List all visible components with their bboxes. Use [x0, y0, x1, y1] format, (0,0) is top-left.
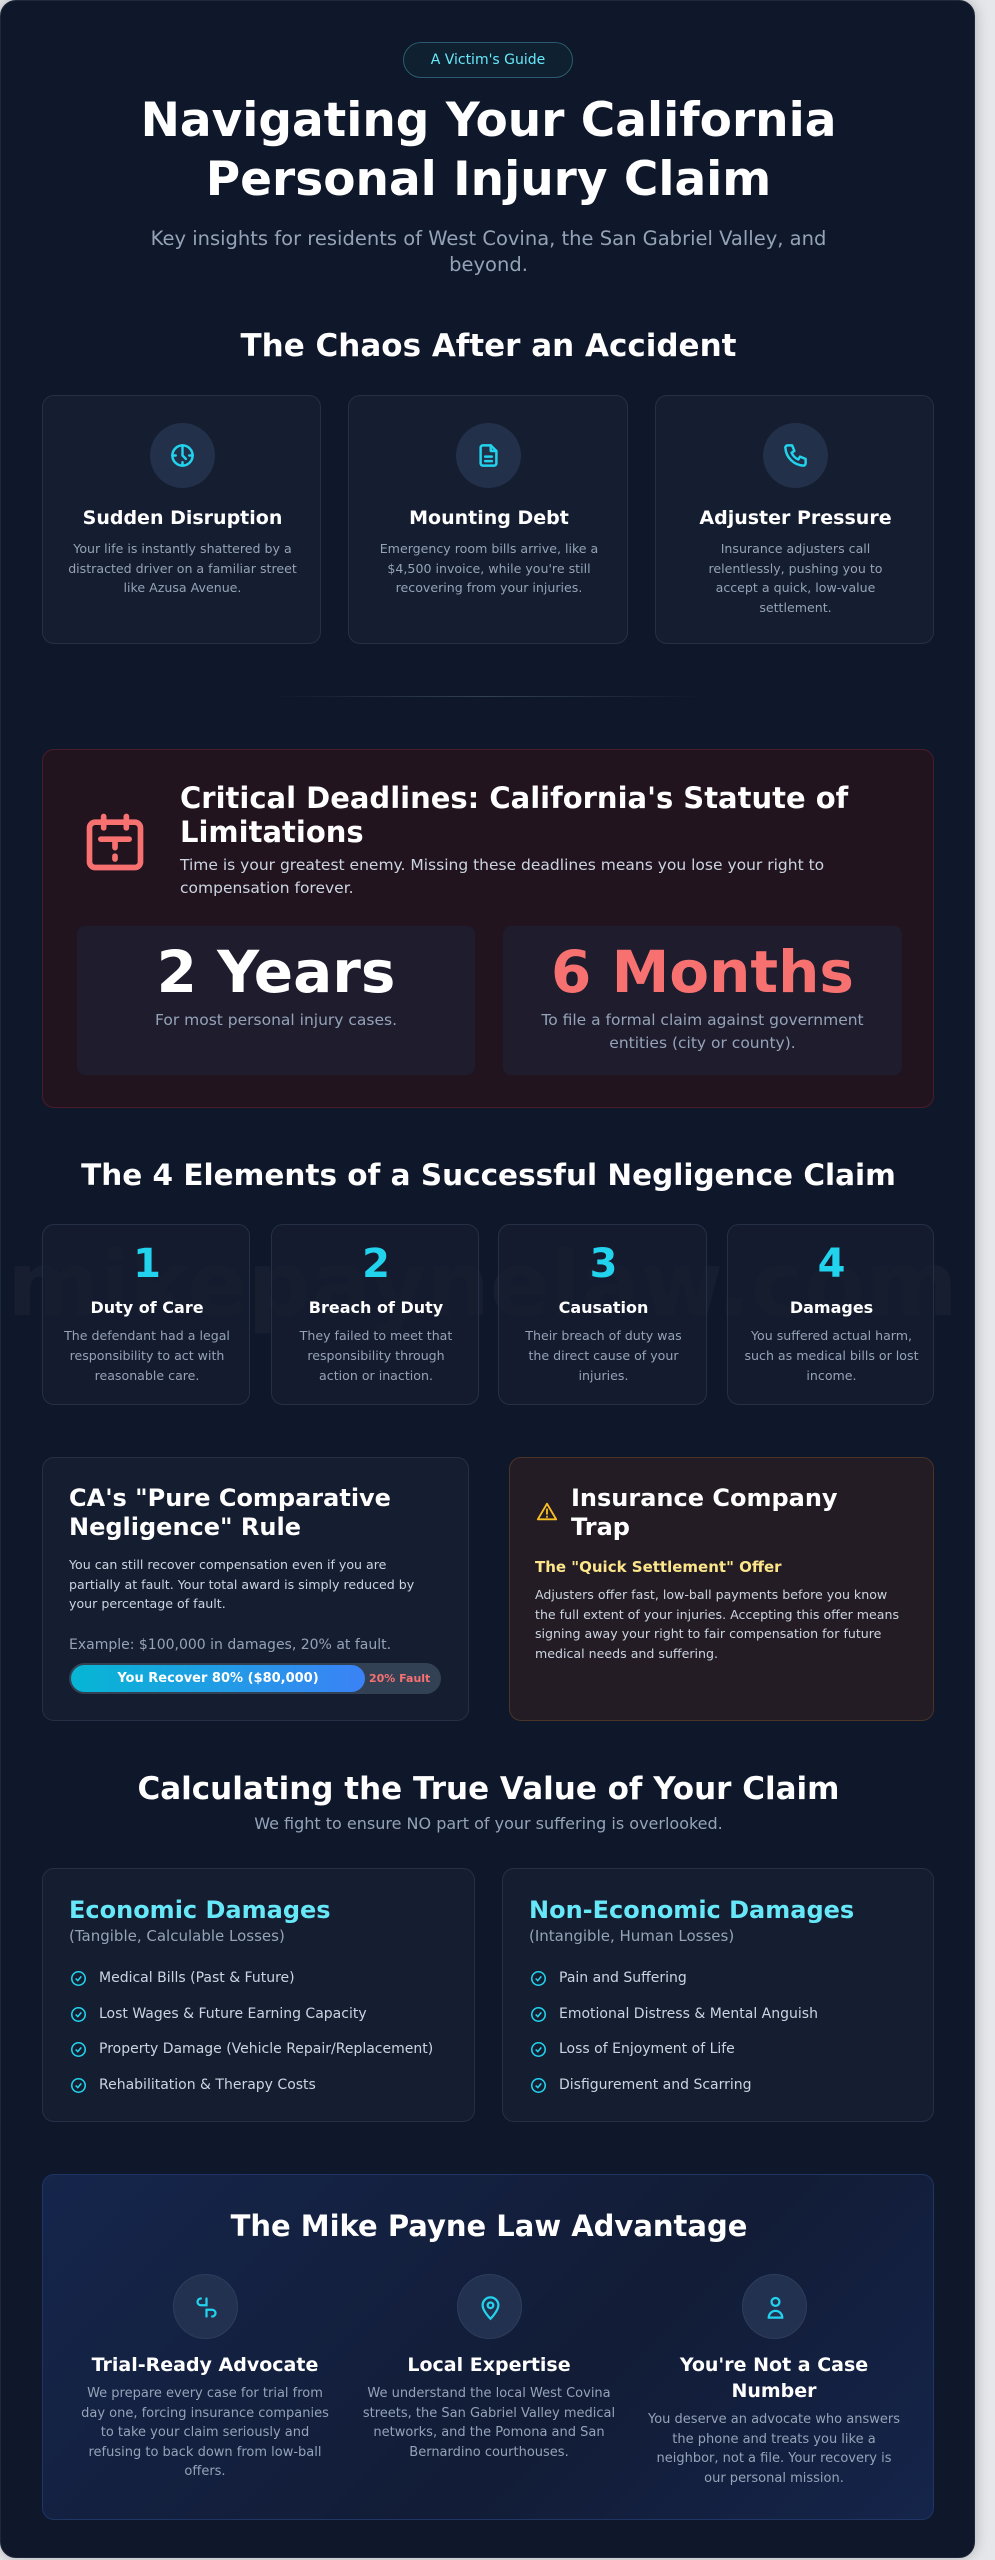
- stat: 6 months: To file a formal claim against government entities (city or county).: [541, 1011, 864, 1052]
- list: non-economic: [531, 1970, 818, 2093]
- list: non-economic: Disfigurement and Scarring: [559, 2076, 752, 2092]
- list: economic: Lost Wages & Future Earning Capacity: [99, 2006, 367, 2022]
- element 1: [42, 1224, 250, 1405]
- panel: non-economic damages: (Intangible, Human Losses): [529, 1927, 734, 1945]
- card: Sudden Disruption: Sudden Disruption: [83, 507, 282, 529]
- advantage: trial-ready: Trial-Ready Advocate: [92, 2354, 318, 2376]
- panel: non-economic damages: [502, 1868, 934, 2122]
- element 3: 3: [590, 1241, 617, 1287]
- card: Mounting Debt: Mounting Debt: [409, 507, 569, 529]
- advantage: trial-ready: We prepare every case for trial from day one, forcing insurance companies to take your claim seriously and refusing to back down from low-ball offers.: [81, 2386, 329, 2479]
- text: deadline intro: Time is your greatest enemy. Missing these deadlines means you lose your right to compensation forever.: [180, 856, 824, 897]
- card: Adjuster Pressure: Adjuster Pressure: [699, 507, 892, 529]
- icon: clock: [150, 423, 215, 488]
- bar: recovery: 20% Fault: [369, 1672, 430, 1685]
- list: economic: Rehabilitation & Therapy Costs: [99, 2076, 316, 2092]
- title: Personal Injury Claim: [206, 152, 771, 207]
- card: Sudden Disruption: [42, 395, 321, 644]
- element 2: They failed to meet that responsibility through action or inaction.: [300, 1328, 452, 1383]
- element 1: The defendant had a legal responsibility to act with reasonable care.: [64, 1328, 230, 1383]
- element 1: 1: [133, 1241, 161, 1287]
- panel: non-economic damages: Non-Economic Damages: [529, 1896, 854, 1924]
- subtitle: Key insights for residents of West Covina, the San Gabriel Valley, and beyond.: [151, 227, 826, 276]
- advantage: not a case number: You're Not a Case Number: [680, 2354, 868, 2402]
- list: economic: Medical Bills (Past & Future): [99, 1970, 295, 1986]
- card: Mounting Debt: [348, 395, 628, 644]
- advantage: trial-ready: [81, 2274, 329, 2479]
- panel: pure comparative negligence: [42, 1457, 469, 1721]
- stat: 2 years: For most personal injury cases.: [155, 1011, 397, 1029]
- card: Sudden Disruption: Your life is instantly shattered by a distracted driver on a familiar street like Azusa Avenue.: [68, 541, 297, 595]
- advantage: local expertise: [363, 2274, 615, 2460]
- element 2: 2: [362, 1241, 390, 1287]
- stat: 6 months: 6 Months: [551, 938, 854, 1006]
- element 4: Damages: [790, 1298, 873, 1317]
- card: Adjuster Pressure: [655, 395, 934, 644]
- watermark: mikepaynelaw.com: [7, 1232, 958, 1336]
- stat: 6 months: [503, 926, 902, 1075]
- panel: insurance company trap: Insurance Company Trap: [571, 1484, 838, 1541]
- stat: 2 years: 2 Years: [157, 938, 395, 1006]
- badge: A Victim's Guide: [403, 42, 573, 78]
- panel: pure comparative negligence: CA's "Pure Comparative Negligence" Rule: [69, 1484, 391, 1541]
- heading: deadlines: Critical Deadlines: California's Statute of Limitations: [180, 781, 848, 849]
- panel: chaos cards: [42, 395, 934, 644]
- panel: insurance company trap: [509, 1457, 934, 1721]
- bar: recovery: [69, 1663, 441, 1694]
- panel: critical deadlines: [42, 749, 934, 1108]
- list: non-economic: Emotional Distress & Mental Anguish: [559, 2006, 818, 2022]
- panel: pure comparative negligence: Example: $100,000 in damages, 20% at fault.: [69, 1637, 391, 1653]
- stat: 2 years: [77, 926, 475, 1075]
- panel: mike payne law advantage: The Mike Payne Law Advantage: [231, 2209, 747, 2243]
- advantage: not a case number: [648, 2274, 900, 2486]
- heading: chaos: The Chaos After an Accident: [240, 328, 736, 364]
- element 2: [271, 1224, 479, 1405]
- panel: insurance company trap: Adjusters offer fast, low-ball payments before you know the full extent of your injuries. Accepting this offer means signing away your right to fair compensation for future medical needs and suffering.: [535, 1587, 899, 1660]
- element 3: Their breach of duty was the direct cause of your injuries.: [525, 1328, 682, 1383]
- panel: 4 elements: [42, 1224, 934, 1405]
- advantage: not a case number: You deserve an advocate who answers the phone and treats you like a neighbor, not a file. Your recovery is our personal mission.: [648, 2412, 900, 2486]
- list: non-economic: Loss of Enjoyment of Life: [559, 2041, 735, 2057]
- element 4: [727, 1224, 934, 1405]
- panel: economic damages: [42, 1868, 475, 2122]
- heading: 4 elements: The 4 Elements of a Successful Negligence Claim: [81, 1158, 896, 1192]
- panel: economic damages: Economic Damages: [69, 1896, 331, 1924]
- title: Navigating Your California: [141, 93, 836, 148]
- icon: phone: [763, 423, 828, 488]
- element 3: [498, 1224, 707, 1405]
- badge: A Victim's Guide: A Victim's Guide: [431, 52, 545, 68]
- list: economic: Property Damage (Vehicle Repair/Replacement): [99, 2041, 433, 2057]
- panel: mike payne law advantage: [42, 2174, 934, 2520]
- title: [141, 93, 836, 207]
- icon: warning: [536, 1502, 558, 1520]
- element 4: 4: [818, 1241, 845, 1287]
- element 4: You suffered actual harm, such as medical bills or lost income.: [744, 1328, 919, 1383]
- element 1: Duty of Care: [90, 1298, 204, 1317]
- card: Mounting Debt: Emergency room bills arrive, like a $4,500 invoice, while you're still recovering from your injuries.: [380, 541, 598, 595]
- list: non-economic: Pain and Suffering: [559, 1970, 687, 1986]
- list: economic: [71, 1970, 433, 2093]
- panel: economic damages: (Tangible, Calculable Losses): [69, 1927, 285, 1945]
- element 2: Breach of Duty: [309, 1298, 443, 1317]
- element 3: Causation: [559, 1298, 648, 1317]
- heading: calculating value: Calculating the True Value of Your Claim: [138, 1771, 839, 1807]
- icon: document: [456, 423, 521, 488]
- advantage: local expertise: Local Expertise: [407, 2354, 571, 2376]
- panel: pure comparative negligence: You can still recover compensation even if you are partially at fault. Your total award is simply reduced by your percentage of fault.: [69, 1557, 414, 1611]
- icon: calendar: [86, 814, 144, 870]
- advantage: local expertise: We understand the local West Covina streets, the San Gabriel Valley medical networks, and the Pomona and San Bernardino courthouses.: [363, 2386, 615, 2460]
- card: Adjuster Pressure: Insurance adjusters call relentlessly, pushing you to accept a quick, low-value settlement.: [709, 541, 882, 615]
- panel: insurance company trap: The "Quick Settlement" Offer: [535, 1558, 782, 1576]
- bar: recovery: You Recover 80% ($80,000): [117, 1671, 319, 1686]
- subheading: We fight to ensure NO part of your suffering is overlooked.: [254, 1814, 723, 1833]
